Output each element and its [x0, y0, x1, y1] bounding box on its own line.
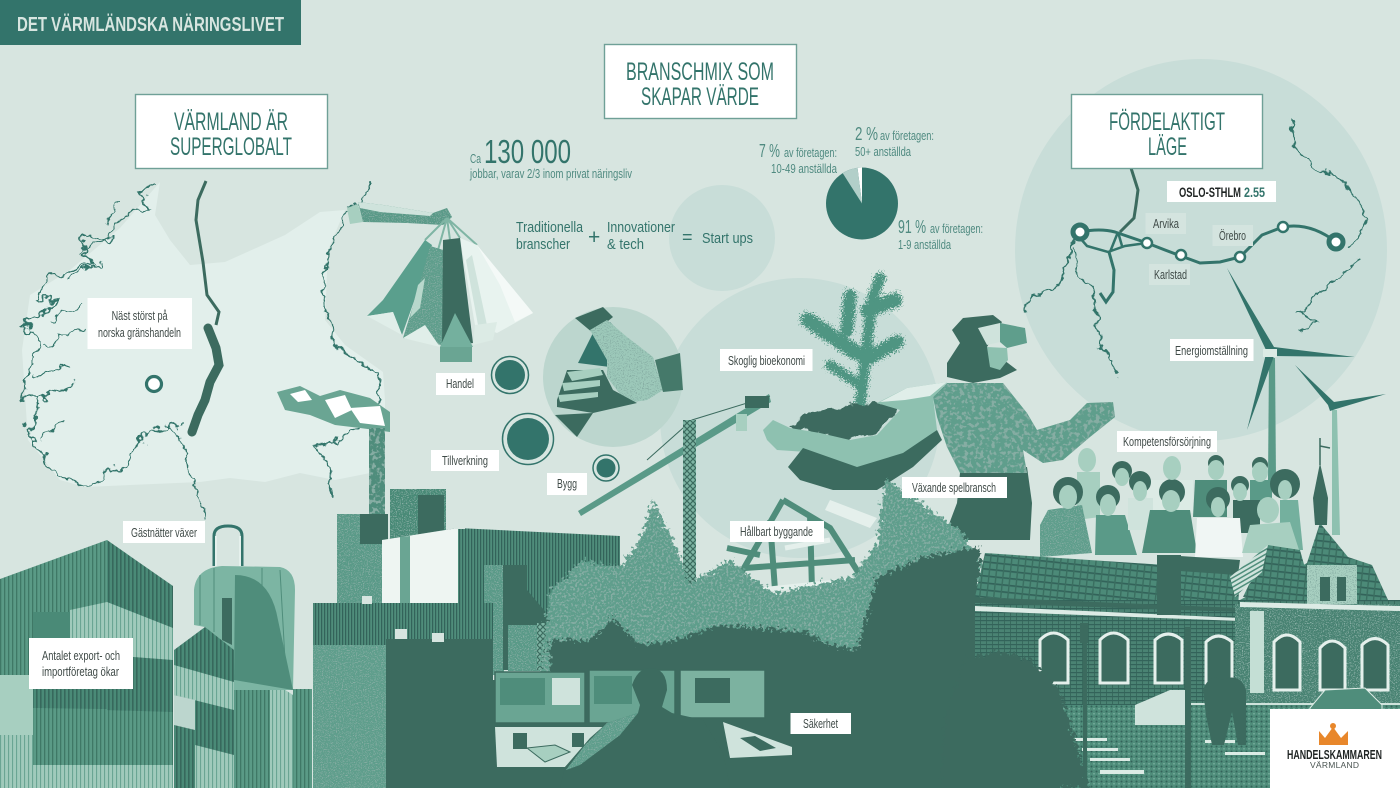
label: Karlstad [1149, 264, 1190, 285]
image: handshake [555, 307, 683, 437]
heading: Branschmix som skapar värde: BRANSCHMIX SOM [626, 58, 774, 86]
bodies front row [1040, 505, 1092, 557]
pine tree [808, 278, 897, 405]
phone on desk [740, 736, 776, 751]
image: building [975, 438, 1400, 788]
label: Antalet export- och importföretag ökar [29, 638, 133, 689]
pie label: 2 %: 50+ anställda [855, 145, 911, 159]
monitor one [495, 672, 585, 723]
label: Kompetensförsörjning [1117, 431, 1217, 452]
map: Oslo-Stockholm railway [1025, 118, 1368, 376]
bubble: Tillverkning [502, 414, 554, 464]
pie label: 91 %: av företagen: [930, 222, 983, 236]
equation: business mix: Traditionella [516, 219, 584, 236]
smoke [277, 386, 390, 432]
image: foliage [493, 480, 980, 788]
spire vane [1320, 438, 1330, 465]
lower fingers [558, 368, 603, 402]
top lattice [745, 396, 769, 408]
bag base [440, 347, 472, 362]
upper hand [590, 320, 663, 403]
label: Tillverkning: Tillverkning [442, 454, 488, 468]
cable [647, 396, 770, 460]
mid-green trees [540, 480, 980, 788]
plaza [975, 705, 1400, 788]
stone column [484, 565, 504, 675]
station Örebro [1235, 252, 1245, 262]
roof vents [362, 521, 550, 642]
crown [1319, 727, 1348, 745]
pie label: 7 %: 10-49 anställda [771, 162, 837, 176]
label: Energiomställning [1170, 339, 1254, 361]
label: Näst störst på norska gränshandeln: Näst störst på [112, 309, 168, 323]
label: Hållbart byggande [730, 521, 824, 542]
bubble: Bygg [593, 455, 619, 481]
main gable roof [1243, 545, 1312, 597]
white cornice [975, 606, 1240, 621]
title banner: DET VÄRMLÄNDSKA NÄRINGSLIVET [17, 13, 284, 36]
dark block tier two [33, 612, 70, 638]
desk right [723, 722, 792, 758]
heading: Fördelaktigt läge [1072, 94, 1262, 168]
label: Kompetensförsörjning: Kompetensförsörjning [1123, 435, 1211, 449]
station Karlstad [1176, 250, 1186, 260]
left pale column [0, 675, 33, 735]
pedestrians [1203, 678, 1246, 745]
circle: bioeconomy backdrop [660, 278, 940, 558]
arched windows [1040, 633, 1388, 690]
dark bag [442, 238, 473, 347]
lower sleeve [555, 413, 593, 437]
heading: Fördelaktigt läge: LÄGE [1148, 133, 1187, 161]
label: Arvika: Arvika [1153, 217, 1179, 231]
stack three [234, 669, 270, 788]
coast south [1074, 250, 1118, 376]
label: Bygg: Bygg [557, 477, 577, 491]
front block mid [313, 645, 386, 788]
pie label: 7 %: 7 % [759, 141, 780, 161]
image: operator at monitors [495, 668, 792, 788]
river thin [196, 181, 219, 325]
equation: business mix: + [588, 226, 600, 249]
bag left one [367, 240, 432, 335]
image: factory [277, 386, 620, 788]
south rail branch [1100, 252, 1114, 302]
label: Handel: Handel [446, 377, 474, 391]
pie label: 2 %: av företagen: [880, 129, 934, 143]
VR headset body [1000, 323, 1027, 348]
people behind [1040, 448, 1303, 557]
stack two [174, 627, 234, 788]
title banner [0, 0, 301, 45]
image: suitcase [194, 526, 295, 690]
tier three dark [33, 650, 173, 710]
label: Örebro: Örebro [1219, 229, 1246, 243]
pie label: 91 %: 91 % [898, 217, 926, 237]
turbine two blades [1295, 365, 1386, 411]
railway loop [1080, 232, 1147, 252]
station east [1278, 222, 1288, 232]
solid dark [493, 680, 980, 788]
panel: map of Norway and Värmland [22, 181, 385, 518]
heading: Värmland är superglobalt [136, 94, 328, 168]
label: Säkerhet [790, 713, 851, 734]
logo: Handelskammaren Värmland: VÄRMLAND [1310, 760, 1359, 770]
smoke white [290, 390, 385, 426]
car dark [1310, 688, 1382, 712]
roof [975, 553, 1240, 610]
pillar [1250, 611, 1264, 693]
hair [947, 315, 1017, 383]
street line [1180, 703, 1400, 705]
label: Skoglig bioekonomi: Skoglig bioekonomi [728, 354, 805, 368]
stat: 130 000 employed: Ca [470, 151, 482, 166]
stack one right face [107, 540, 173, 788]
image: construction crane [578, 394, 771, 590]
highlight on bag [410, 278, 425, 318]
back tower [337, 514, 388, 606]
turbine two tower [1332, 410, 1340, 535]
handles [425, 218, 477, 250]
tier four [33, 708, 173, 765]
gable light slope [1230, 545, 1268, 597]
white bottoms [367, 312, 440, 347]
front block dark [386, 639, 493, 788]
pavilion facade [1235, 604, 1400, 710]
VR headset front [978, 323, 1000, 345]
torso [933, 383, 1115, 473]
faces [1059, 448, 1292, 523]
heading: Värmland är superglobalt: VÄRMLAND ÄR [174, 108, 288, 136]
tower windows [1320, 577, 1346, 601]
station Arvika [1142, 238, 1152, 248]
right sleeve [655, 353, 683, 392]
person [560, 668, 730, 788]
bubble: Handel [492, 356, 528, 394]
beams [727, 500, 860, 590]
left lower column [0, 735, 33, 788]
annex [508, 625, 540, 671]
image: VR person with plant [763, 278, 1115, 540]
callout: Oslo-Sthlm travel time: 2.55 [1244, 184, 1265, 200]
label: Växande spelbransch [902, 477, 1007, 498]
wall [975, 600, 1400, 710]
lower dark trees [550, 547, 980, 788]
light tier two [70, 602, 173, 660]
soil [790, 403, 897, 440]
circle: handshake backdrop [543, 307, 683, 447]
car white [1135, 690, 1190, 725]
heading: Fördelaktigt läge: FÖRDELAKTIGT [1109, 108, 1225, 136]
station Oslo [1073, 225, 1087, 239]
cross gable roof [1240, 523, 1388, 600]
stat: 130 000 employed [469, 133, 633, 181]
label: Karlstad: Karlstad [1154, 268, 1187, 282]
equation: business mix: Start ups [702, 230, 753, 247]
hedge on roof [1165, 555, 1240, 575]
label: Säkerhet: Säkerhet [803, 717, 838, 731]
heading: Värmland är superglobalt: SUPERGLOBALT [170, 133, 292, 161]
desk [495, 727, 603, 767]
label: Tillverkning [431, 450, 499, 471]
river [1120, 168, 1138, 232]
low block [313, 603, 493, 648]
coast outline west [22, 185, 178, 487]
pie label: 2 %: 2 % [855, 124, 878, 144]
stat: 130 000 employed: jobbar, varav 2/3 inom privat näringsliv [469, 167, 633, 181]
pie label: 2 % [855, 124, 934, 159]
label: Näst störst på norska gränshandeln: norska gränshandeln [98, 326, 181, 340]
image: wind turbines [1227, 268, 1386, 535]
main block [382, 528, 620, 640]
bodies back row [1077, 472, 1100, 520]
label: Gästnätter växer [123, 521, 205, 543]
traffic lights [1080, 555, 1191, 788]
white panel [382, 528, 458, 605]
white floors [760, 540, 855, 590]
white roof [825, 500, 877, 528]
shoulder highlights [566, 713, 638, 770]
fjords west [35, 200, 120, 440]
marker [146, 376, 162, 392]
border line south [166, 425, 205, 518]
bush solid fill [950, 700, 1060, 788]
arm highlight [358, 202, 433, 216]
arm lower [358, 202, 452, 225]
label: Örebro [1212, 225, 1253, 246]
label: Energiomställning: Energiomställning [1175, 344, 1248, 358]
logo: Handelskammaren Värmland [1270, 709, 1400, 788]
pie label: 7 % [759, 141, 837, 176]
circle: start ups backdrop [669, 185, 775, 291]
coast east [1291, 118, 1368, 245]
mugs [513, 733, 584, 749]
bush over building edge [940, 650, 1090, 788]
lower body [943, 467, 1032, 540]
pie label: 91 % [898, 217, 983, 252]
label: Arvika [1146, 213, 1186, 234]
label: Antalet export- och importföretag ökar: Antalet export- och [42, 649, 120, 663]
pale fold [477, 245, 533, 322]
label: Växande spelbransch: Växande spelbransch [912, 481, 996, 495]
railway main [1080, 226, 1336, 263]
top forearm shadow [578, 322, 627, 367]
panel: location circle [1015, 59, 1387, 441]
coast west [1025, 232, 1078, 312]
station Stockholm [1329, 235, 1343, 249]
stat: 130 000 employed: 130 000 [484, 133, 571, 170]
turbine one blades [1227, 268, 1355, 430]
zebra crossing [1075, 738, 1265, 774]
cab [736, 414, 747, 431]
laptop [527, 745, 570, 762]
image: arm with shopping bags [347, 202, 533, 362]
white bag right [460, 238, 533, 333]
spire [1313, 463, 1328, 525]
map land fill [22, 182, 385, 487]
tier five [33, 765, 173, 788]
label: Skoglig bioekonomi [720, 349, 812, 371]
turbine one tower [1268, 358, 1276, 480]
label: Antalet export- och importföretag ökar: importföretag ökar [42, 665, 119, 679]
lower hand [557, 370, 637, 413]
label: Hållbart byggande: Hållbart byggande [740, 525, 813, 539]
lattice tower [537, 623, 550, 670]
equation: business mix [516, 219, 753, 253]
cornice dark [975, 597, 1240, 612]
equation: business mix: = [682, 227, 693, 247]
hand shadow [788, 430, 942, 490]
mast [683, 420, 696, 590]
pavilion cornice [1240, 602, 1400, 611]
stack one left face [0, 540, 107, 788]
tower facade [1307, 565, 1357, 605]
callout: Oslo-Sthlm travel time: OSLO-STHLM [1179, 184, 1241, 200]
chimney [369, 428, 385, 518]
pie chart: company sizes [826, 168, 898, 240]
pie label: 91 %: 1-9 anställda [898, 238, 951, 252]
top sleeve [575, 307, 613, 333]
coast south-east [1298, 258, 1358, 332]
equation: business mix: Innovationer [607, 219, 675, 236]
image: timber structure [727, 500, 877, 590]
image: containers [0, 540, 312, 788]
heading: Branschmix som skapar värde: SKAPAR VÄRDE [641, 83, 759, 111]
stack four [293, 689, 312, 788]
heading: Branschmix som skapar värde [604, 44, 796, 118]
equation: business mix: branscher [516, 236, 570, 253]
equation: business mix: & tech [607, 236, 644, 253]
face [987, 347, 1008, 370]
label: Bygg [547, 473, 587, 495]
hair [1053, 455, 1300, 511]
jib [578, 394, 771, 516]
arm highlight [880, 382, 947, 402]
callout: Oslo-Sthlm travel time [1167, 181, 1276, 202]
bag inner fold [440, 313, 473, 347]
river thick [192, 328, 219, 432]
tall tower [390, 489, 446, 539]
coast outline east [316, 182, 380, 498]
label: Näst störst på norska gränshandeln [88, 298, 192, 349]
sleeve [347, 204, 363, 224]
dark shaft [503, 565, 550, 670]
monitor three [680, 670, 765, 718]
monitor two [589, 670, 675, 723]
arm and cupped hand [763, 382, 947, 473]
label: Gästnätter växer: Gästnätter växer [131, 526, 197, 540]
bottom white right [473, 322, 497, 345]
pie label: 7 %: av företagen: [784, 146, 837, 160]
label: Handel [436, 373, 485, 395]
bag left two [403, 246, 450, 345]
